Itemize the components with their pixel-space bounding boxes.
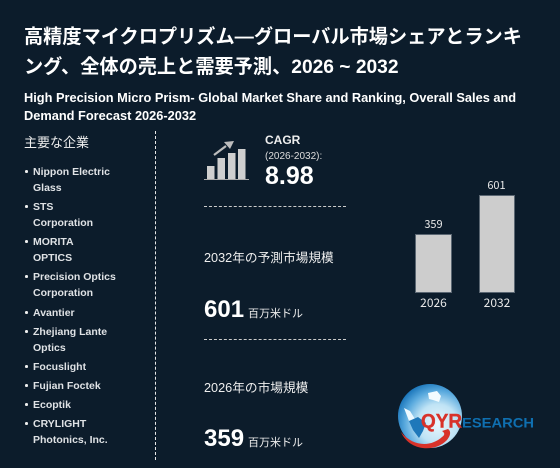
company: Avantier [33,307,75,319]
company: CRYLIGHT [33,418,86,430]
company: MORITA [33,236,74,248]
company: Photonics, Inc. [33,434,108,446]
bar 2026 [416,234,452,292]
subtitle: High Precision Micro Prism- Global Market Share and Ranking, Overall Sales and Demand Forecast 2026-2032 [24,90,516,122]
title: 高精度マイクロプリズム—グローバル市場シェアとランキング、全体の売上と需要予測、2026 ~ 2032 [24,27,522,78]
company: Zhejiang Lante [33,326,107,338]
bar chart [415,177,515,311]
years [420,294,511,311]
company: Ecoptik [33,399,71,411]
company [33,164,110,196]
values: 601 [487,177,506,193]
company: Fujian Foctek [33,380,101,392]
values: 359 [424,216,443,232]
icon: growth bars with arrow [204,141,249,180]
value: 359: 359 百万米ドル [204,425,303,452]
company [33,234,74,266]
bar 2032 [480,196,514,292]
years: 2032 [484,294,511,311]
company: Optics [33,342,66,354]
company: Corporation [33,217,93,229]
company: OPTICS [33,252,72,264]
red swoosh [401,429,450,448]
label: 2032 forecast: 2032年の予測市場規模 [204,251,334,265]
CAGR value: 8.98 [265,162,314,190]
company: Precision Optics [33,271,116,283]
globe [398,384,462,448]
values [424,177,506,232]
label: 2026 market size: 2026年の市場規模 [204,381,308,395]
logo: QYResearch globe [398,384,534,448]
years: 2026 [420,294,447,311]
company: Nippon Electric [33,166,110,178]
company: STS [33,201,53,213]
company: Glass [33,182,62,194]
company: Corporation [33,287,93,299]
company [33,416,108,448]
wordmark: QYR [421,412,462,432]
panel: company list [25,166,116,446]
CAGR period: (2026-2032): [265,151,322,162]
CAGR label: CAGR [265,133,300,147]
company [33,269,116,301]
company: Focuslight [33,361,86,373]
value: 601: 601 百万米ドル [204,296,303,323]
company [33,324,107,356]
logo: QYResearch globe: ESEARCH [462,414,534,430]
company [33,199,93,231]
heading: key companies: 主要な企業 [24,135,89,150]
